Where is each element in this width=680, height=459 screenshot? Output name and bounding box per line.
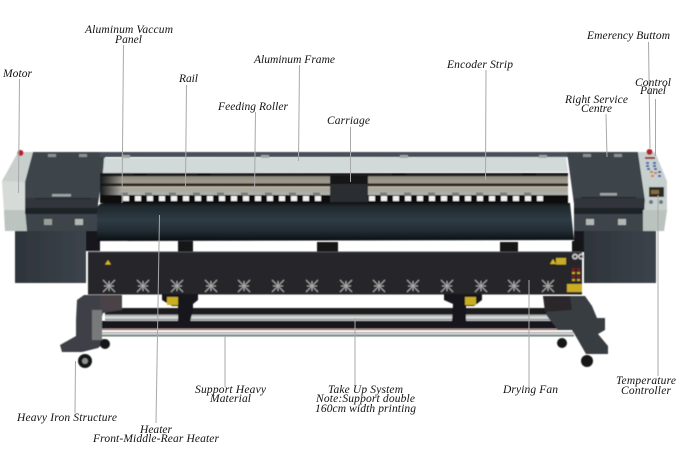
warning labels and indicators [105, 254, 584, 292]
top frame bar [100, 152, 570, 157]
callout: Support Heavy Material [195, 336, 267, 405]
callout: Right Service Centre: Centre [581, 103, 612, 115]
callout: Carriage [327, 115, 370, 182]
right leg [584, 231, 656, 283]
callout: Support Heavy Material: Support Heavy [195, 384, 267, 396]
callout: Temperature Controller: Controller [621, 385, 672, 397]
drying fan beam [88, 252, 582, 294]
mount brackets [162, 294, 482, 322]
left end cap (light) [2, 152, 33, 231]
carriage [330, 176, 368, 202]
callout: Aluminum Frame [253, 54, 335, 161]
drying fans [103, 280, 554, 292]
motor emergency button [18, 150, 24, 156]
callout: Temperature Controller: Temperature [616, 375, 676, 387]
emergency button [646, 149, 652, 155]
callout: Aluminum Vaccum Panel: Aluminum Vaccum [84, 24, 173, 36]
callout: Right Service Centre [564, 94, 628, 157]
left leg [15, 231, 86, 283]
right iron stand [543, 296, 608, 367]
callout: Emerency Buttom: Emerency Buttom [586, 30, 670, 42]
callout: Aluminum Frame: Aluminum Frame [253, 54, 335, 66]
callout: Encoder Strip [446, 59, 513, 180]
callout: Take Up System: Take Up System [328, 384, 403, 396]
callout: Take Up System: 160cm width printing [315, 403, 416, 415]
callout: Take Up System: Note:Support double [315, 393, 415, 405]
callout: Heater: Heater [139, 424, 173, 436]
callout: Right Service Centre: Right Service [564, 94, 628, 106]
left service cabinet [25, 152, 106, 231]
callout: Support Heavy Material: Material [209, 393, 251, 405]
take-up rails [85, 308, 582, 336]
callout: Control Panel [635, 77, 671, 156]
callout: Encoder Strip: Encoder Strip [446, 59, 513, 71]
printer machine [2, 149, 667, 368]
callout: Motor [2, 68, 33, 193]
callout: Feeding Roller: Feeding Roller [217, 101, 289, 113]
callout: Drying Fan: Drying Fan [502, 384, 558, 396]
left iron stand [60, 295, 122, 368]
callout: Heater [92, 215, 220, 445]
callout: Motor: Motor [2, 68, 33, 80]
frame clasps [122, 155, 547, 158]
callout: Take Up System [315, 318, 416, 415]
aluminum frame panel [103, 157, 568, 173]
callout: Rail [178, 73, 198, 186]
callout: Emerency Buttom [586, 30, 670, 148]
callout: Feeding Roller [217, 101, 289, 195]
callout: Rail: Rail [178, 73, 198, 85]
callout: Aluminum Vaccum Panel [84, 24, 173, 203]
heads and rollers row [100, 192, 568, 203]
feet under roller [178, 241, 584, 252]
callout: Temperature Controller [616, 195, 676, 397]
callout: Heater: Front-Middle-Rear Heater [92, 433, 220, 445]
right service cabinet [567, 152, 645, 231]
callout: Heavy Iron Structure: Heavy Iron Structure [16, 412, 117, 424]
callout: Carriage: Carriage [327, 115, 370, 127]
temperature display [649, 187, 664, 197]
callout: Drying Fan [502, 280, 558, 396]
callout: Control Panel: Control [635, 77, 671, 89]
callout: Heavy Iron Structure [16, 361, 117, 424]
callout: Control Panel: Panel [639, 85, 666, 97]
heater roller [97, 203, 574, 241]
feeding rail area [100, 173, 568, 195]
control panel [638, 152, 667, 231]
callout: Aluminum Vaccum Panel: Panel [114, 34, 142, 46]
